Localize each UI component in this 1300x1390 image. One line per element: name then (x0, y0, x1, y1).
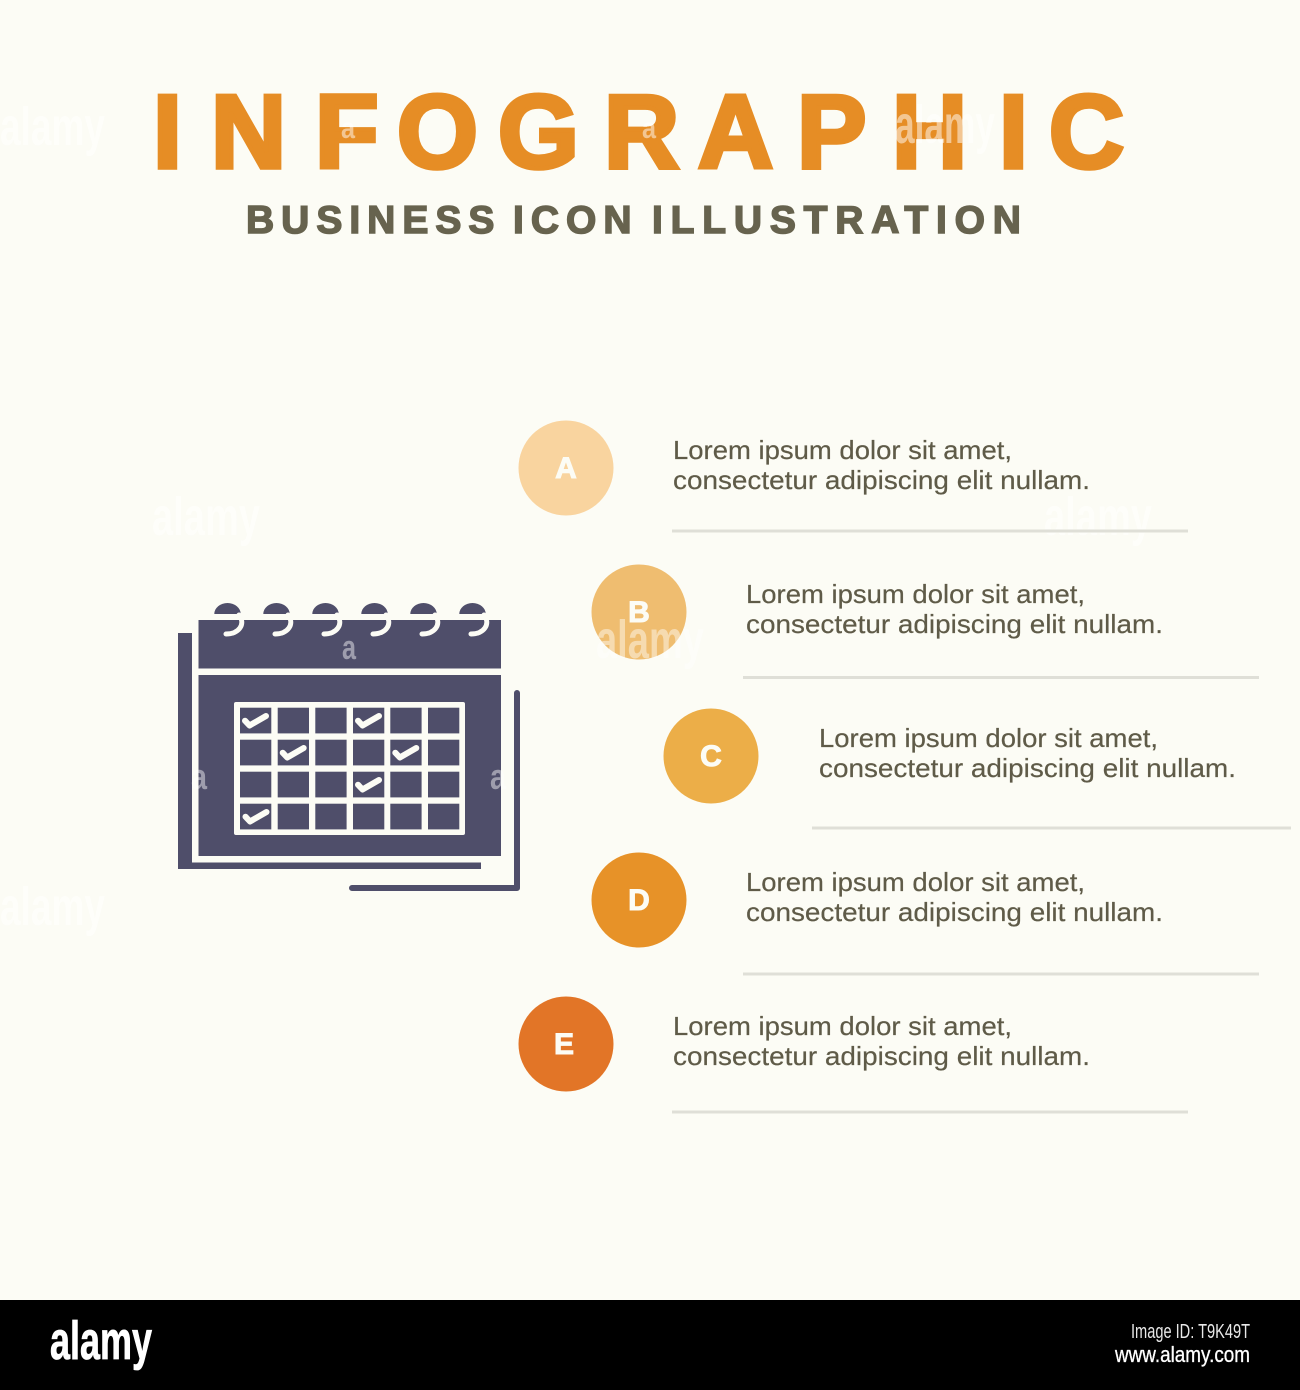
watermarks on title: alamy (895, 95, 995, 155)
badge A (518, 420, 614, 516)
background watermarks: alamy (1044, 487, 1152, 547)
step B (592, 564, 1259, 679)
back sheet left (178, 633, 481, 869)
background watermarks (0, 97, 1152, 937)
rule B (743, 676, 1259, 679)
badge B (592, 564, 686, 660)
background watermarks: alamy (152, 487, 260, 547)
rule A (672, 530, 1188, 532)
calendar body (198, 675, 501, 856)
watermark marks on icon: a (490, 756, 507, 797)
letter E: E (554, 1028, 574, 1061)
watermarks on title: a (341, 112, 355, 145)
step E (518, 996, 1188, 1114)
letter B: B (628, 596, 650, 629)
step D (592, 852, 1259, 976)
calendar header (198, 620, 501, 668)
background watermarks: alamy (0, 97, 105, 157)
background watermarks: alamy (0, 877, 105, 937)
text C: Lorem ipsum dolor sit amet, (819, 723, 1158, 753)
website: www.alamy.com (1114, 1342, 1250, 1367)
text D: consectetur adipiscing elit nullam. (746, 897, 1163, 927)
text C: consectetur adipiscing elit nullam. (819, 753, 1236, 783)
text D (746, 867, 1163, 927)
spiral rings (214, 603, 487, 634)
watermark marks on icon: a (191, 756, 208, 797)
subtitle: ICON (513, 199, 656, 242)
rule E (672, 1110, 1188, 1114)
text B: Lorem ipsum dolor sit amet, (746, 579, 1085, 609)
rule C (812, 826, 1291, 830)
text A (673, 435, 1090, 495)
watermarks on title: a (642, 112, 656, 145)
check marks (245, 716, 416, 822)
badge E (518, 996, 614, 1092)
footer logo: alamy (50, 1311, 152, 1371)
step C (664, 708, 1291, 830)
text A: consectetur adipiscing elit nullam. (673, 465, 1090, 495)
letter D: D (628, 884, 650, 917)
letter C: C (700, 740, 722, 773)
rule D (743, 972, 1259, 976)
date grid (234, 702, 465, 835)
badge D (592, 852, 686, 948)
footer bar (0, 1300, 1300, 1390)
text B: consectetur adipiscing elit nullam. (746, 609, 1163, 639)
badge C (664, 708, 758, 804)
text D: Lorem ipsum dolor sit amet, (746, 867, 1085, 897)
watermark on B: alamy (596, 610, 704, 670)
text B (746, 579, 1163, 639)
step A (518, 420, 1188, 532)
image id: Image ID: T9K49T (1131, 1321, 1250, 1343)
text E: consectetur adipiscing elit nullam. (673, 1041, 1090, 1071)
title: INFOGRAPHIC (153, 74, 1124, 190)
text A: Lorem ipsum dolor sit amet, (673, 435, 1012, 465)
text E (673, 1011, 1090, 1071)
watermark marks on icon (191, 629, 507, 797)
subtitle: BUSINESS (246, 199, 519, 242)
watermarks on title (341, 95, 995, 155)
letter A: A (555, 452, 577, 485)
subtitle: ILLUSTRATION (652, 199, 1029, 242)
back sheet right (349, 690, 520, 891)
icon: calendar (178, 603, 520, 891)
watermark marks on icon: a (342, 629, 357, 667)
text E: Lorem ipsum dolor sit amet, (673, 1011, 1012, 1041)
text C (819, 723, 1236, 783)
